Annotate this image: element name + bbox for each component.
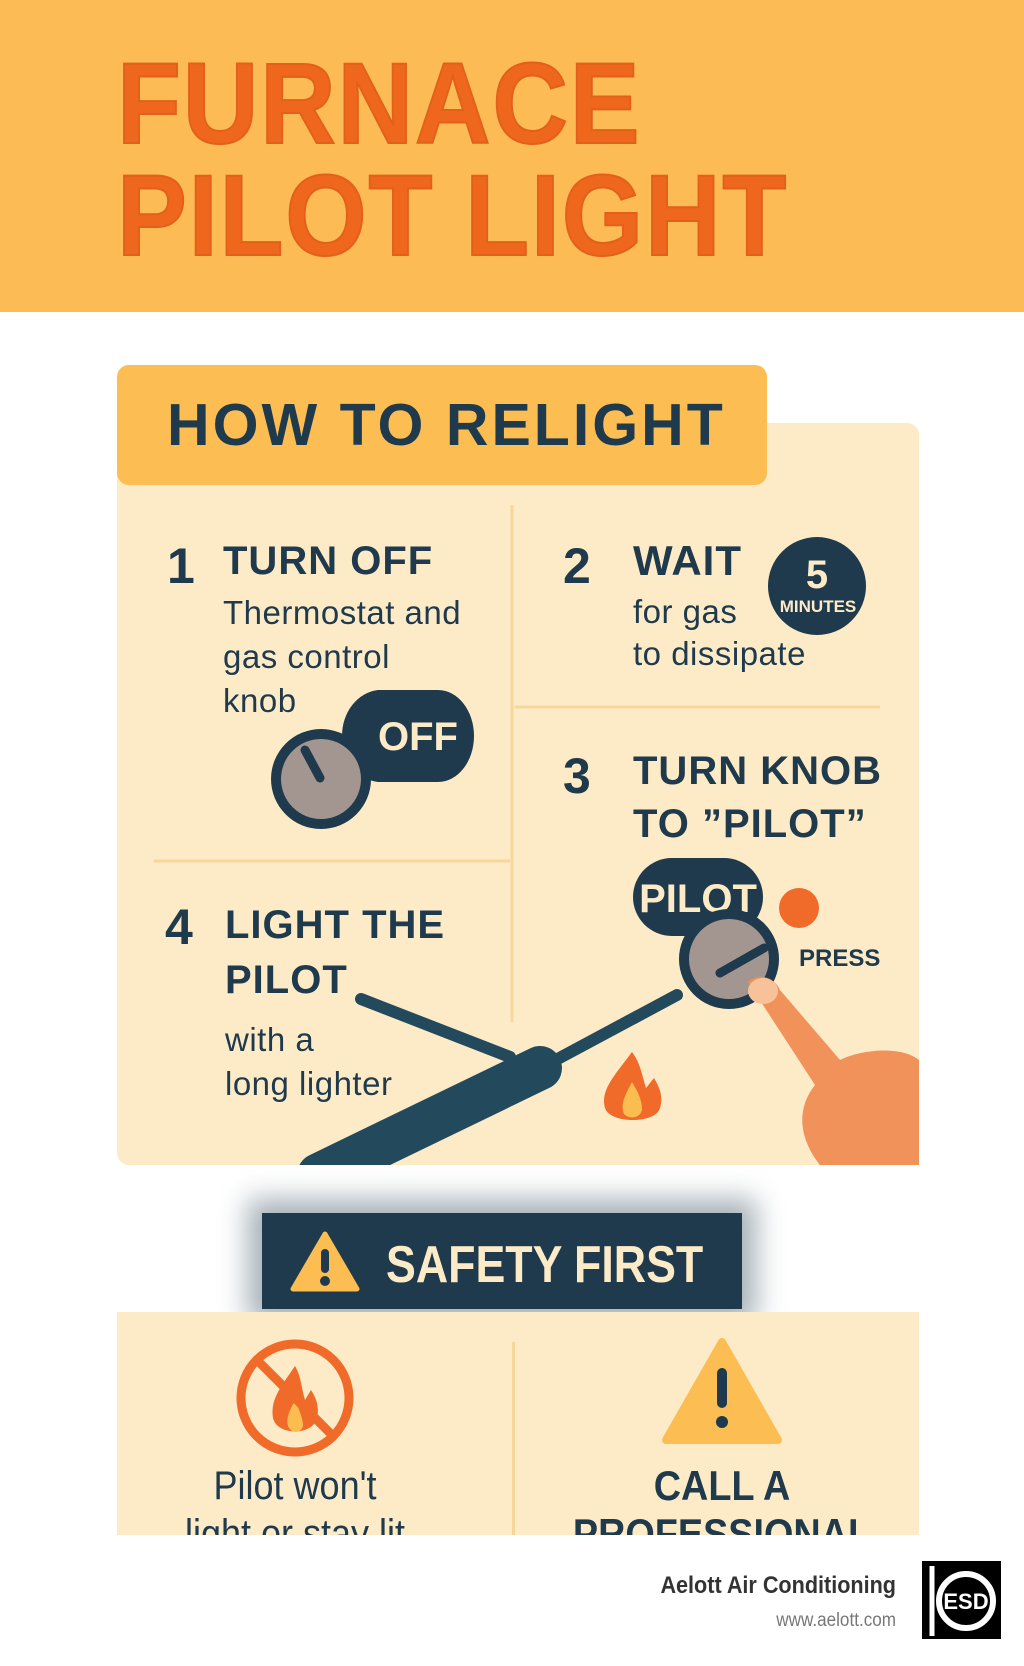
logo <box>922 1561 1001 1639</box>
panel: how to relight: 3 <box>563 748 591 804</box>
footer brand: www.aelott.com <box>776 1610 896 1631</box>
step 4 <box>165 899 445 1102</box>
panel: how to relight: WAIT <box>633 537 742 584</box>
panel: how to relight: PILOT <box>225 958 348 1002</box>
illustrations <box>154 505 919 1165</box>
panel: how to relight: LIGHT THE <box>225 903 445 947</box>
heading tab: HOW TO RELIGHT <box>167 392 726 458</box>
panel: how to relight: Thermostat and <box>223 594 461 631</box>
step 3 <box>563 748 882 846</box>
header band <box>0 0 1024 312</box>
panel: how to relight: with a <box>225 1021 314 1058</box>
logo: ESD <box>943 1589 989 1614</box>
icon: flame <box>604 1052 661 1120</box>
panel: safety <box>117 1312 919 1535</box>
icon: 5 minutes: MINUTES <box>780 597 856 616</box>
icon: hand <box>748 977 919 1165</box>
title: FURNACE <box>117 40 641 168</box>
title <box>117 40 788 280</box>
heading tab <box>117 365 767 485</box>
item: call a professional: CALL A <box>654 1462 790 1509</box>
safety banner <box>262 1213 742 1309</box>
title: PILOT LIGHT <box>117 152 788 280</box>
panel: how to relight: gas control <box>223 638 390 675</box>
banner heading: SAFETY FIRST <box>386 1236 703 1294</box>
footer brand: Aelott Air Conditioning <box>660 1572 896 1599</box>
icon: pilot knob: PILOT <box>639 877 757 921</box>
icon: no fire <box>236 1340 354 1456</box>
panel: how to relight: TO ”PILOT” <box>633 802 867 846</box>
item: pilot won't light <box>185 1340 405 1535</box>
panel: how to relight: long lighter <box>225 1065 392 1102</box>
item: pilot won't light: Pilot won't <box>214 1464 376 1508</box>
press label: PRESS <box>799 945 880 972</box>
step 1 <box>167 538 461 719</box>
step 2 <box>563 537 806 672</box>
panel: how to relight: TURN OFF <box>223 539 433 583</box>
item: call a professional <box>573 1338 871 1535</box>
panel background <box>117 423 919 1165</box>
icon: off knob: OFF <box>378 715 458 759</box>
icon: 5 minutes: 5 <box>806 553 828 597</box>
icon: 5 minutes <box>768 537 866 635</box>
panel: how to relight: 1 <box>167 538 195 594</box>
panel: how to relight: to dissipate <box>633 635 806 672</box>
icon: warning <box>662 1338 782 1444</box>
icon: off knob <box>271 690 474 829</box>
icon: warning triangle <box>290 1232 360 1292</box>
panel: how to relight: for gas <box>633 593 737 630</box>
panel: how to relight: TURN KNOB <box>633 749 882 793</box>
icon: pilot knob <box>633 858 819 1009</box>
lighter <box>319 995 677 1175</box>
panel: how to relight: 2 <box>563 538 591 594</box>
footer brand <box>660 1572 896 1631</box>
panel: how to relight <box>117 365 919 1165</box>
panel: how to relight: knob <box>223 682 297 719</box>
panel: how to relight: 4 <box>165 899 193 955</box>
